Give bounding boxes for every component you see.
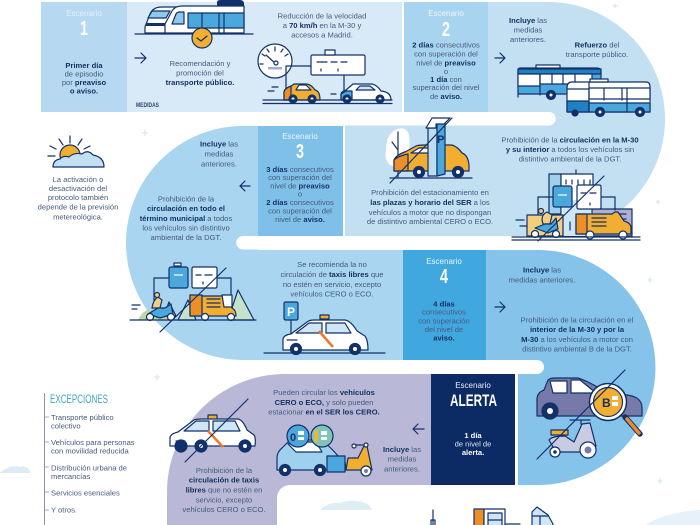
text: includes previous measures: medidas [205, 150, 234, 158]
text: M-30 interior ban: interior de la M-30 y por la [530, 325, 625, 334]
text: weather note: desactivación del [49, 184, 107, 193]
text: taxis recommendation: no estén en servicio, excepto [283, 280, 381, 289]
text: scenario 4 trigger: 4 días [433, 300, 455, 308]
text: scenario 3 trigger: 3 días consecutivos [266, 165, 334, 174]
arrow: scenario 3 [240, 181, 250, 191]
icon: car with magnifier and scooter [537, 370, 642, 459]
text: scenario 1 trigger: Primer día [65, 61, 103, 70]
white gap row 3-4 [0, 360, 544, 374]
list: exception items [44, 413, 135, 514]
text: scenario 3 trigger: con superación del [268, 173, 332, 182]
text: taxis recommendation: vehículos CERO o ECO. [290, 290, 374, 298]
text: taxi ban: Prohibición de la [196, 466, 252, 475]
icon: train [135, 0, 253, 48]
text: reinforcement: transporte público. [566, 50, 628, 59]
text: scenario 2 trigger: de aviso. [430, 92, 462, 101]
list: exception items: Y otros. [51, 506, 77, 514]
text: M-30 ban: distintivo ambiental de la DGT. [519, 154, 621, 164]
panel: scenario 1 measures [127, 2, 402, 112]
heading: scenario 1: 1 [80, 18, 88, 40]
text: allowed vehicles: Pueden circular los vehículos [273, 388, 375, 397]
heading: scenario 4 [426, 257, 462, 288]
text: scenario 4 trigger: del nivel de [425, 325, 463, 334]
list: exception items: Distribución urbana de [51, 464, 127, 472]
panel: exceptions list [44, 392, 135, 525]
text: weather note: metereológica. [53, 212, 103, 222]
panel: scenario 2 measures curve [345, 2, 665, 236]
text: includes previous measures: Incluye las [509, 16, 547, 25]
text: speed reduction: accesos a Madrid. [291, 30, 353, 40]
list: exception items: mercancías [51, 472, 90, 481]
text: taxi ban: servicio, excepto [196, 496, 252, 504]
icon: speedometer and sign [258, 44, 392, 104]
arrow: scenario 2 [495, 53, 505, 63]
list: exception items: Vehículos para personas [51, 438, 135, 447]
text: taxi ban: circulación de taxis [189, 476, 259, 484]
heading: scenario 3 [282, 132, 318, 163]
heading: alert: ALERTA [450, 391, 497, 410]
icon: van [190, 295, 236, 320]
text: scenario 3 trigger: nivel de preaviso [270, 182, 330, 191]
icon: weather sun and cloud [48, 136, 104, 167]
panel: scenario 1 row [41, 2, 402, 112]
text: includes previous measures: anteriores. [384, 464, 420, 474]
heading: scenario 3: Escenario [282, 132, 318, 141]
text: scenario 2 trigger: 1 día con [430, 75, 462, 84]
text: scenario 1 trigger: de episodio [65, 70, 103, 78]
text: weather note: depende de la previsión [38, 202, 118, 212]
icon: bus front [567, 79, 650, 116]
heading: scenario 2: Escenario [428, 9, 464, 18]
text: includes previous measures: anteriores. [510, 35, 546, 44]
arrow: scenario 1 [135, 53, 146, 63]
icon: scooter [549, 420, 596, 458]
arrow: alert [413, 424, 424, 434]
heading: alert [450, 381, 497, 410]
text: scenario 2 trigger: o [444, 67, 448, 76]
text: scenario 3 trigger: 2 días consecutivos [266, 198, 334, 207]
text: alert trigger: 1 día [464, 431, 482, 440]
text: public transport recommendation: Recomendación y [170, 59, 230, 68]
label: medidas: MEDIDAS [136, 102, 160, 109]
text: includes previous measures: medidas anteriores. [509, 276, 575, 284]
icon: eco badge [311, 425, 333, 447]
panel: scenario 3 label box [258, 126, 343, 236]
text: includes previous measures: medidas [514, 26, 543, 34]
icon: parking sign and taxi: P [287, 305, 295, 319]
heading: exceptions: EXCEPCIONES [50, 392, 108, 406]
icon: buses [518, 65, 650, 116]
text: municipal ban: término municipal a todos [140, 214, 232, 223]
panel: scenario 2 label box [404, 2, 488, 112]
white gap row 2-3 [236, 236, 700, 250]
list: exception items: Transporte público [51, 413, 114, 422]
text: SER parking ban: las plazas y horario del SER a los [370, 198, 490, 207]
icon: scooter rider [532, 208, 560, 238]
heading: alert: Escenario [455, 381, 491, 390]
panel: scenario 3 left curve [126, 126, 403, 360]
text: reinforcement: Refuerzo del [575, 40, 619, 50]
heading: scenario 1 [66, 9, 102, 40]
text: includes previous measures: Incluye las [383, 445, 421, 454]
list: exception items: con movilidad reducida [51, 446, 129, 456]
panel: alert label box [431, 374, 515, 485]
text: public transport recommendation: transporte público. [166, 78, 234, 87]
text: public transport recommendation: promoción del [176, 68, 224, 78]
heading: scenario 2: 2 [442, 19, 450, 41]
text: includes previous measures: medidas [388, 454, 417, 464]
heading: scenario 4: 4 [440, 266, 449, 288]
icon: van [576, 212, 631, 239]
text: SER parking ban: vehículos a motor que no dispongan [369, 208, 491, 217]
text: taxi ban: libres que no estén en [186, 486, 262, 494]
text: scenario 2 trigger: con superación del [414, 50, 478, 58]
text: SER parking ban: de distintivo ambiental CERO o ECO. [367, 217, 493, 226]
icon: yellow car [284, 84, 320, 103]
heading: scenario 2 [428, 9, 464, 41]
text: scenario 2 trigger: superación del nivel [412, 83, 480, 92]
text: allowed vehicles: estacionar en el SER los CERO. [268, 408, 380, 416]
text: scenario 2 trigger: 2 días consecutivos [412, 40, 480, 50]
text: scenario 4 trigger: con superación [418, 316, 470, 326]
text: scenario 3 trigger: nivel de aviso. [275, 215, 325, 224]
icon: magnifier B badge: B [602, 396, 611, 410]
text: M-30 interior ban: Prohibición de la circulación en el [521, 316, 633, 324]
panel: alert lilac curve [167, 374, 431, 525]
icon: zero badge: 0 [290, 432, 296, 444]
panel: scenario 1 label box [41, 2, 127, 112]
icon: parking ban car: P [437, 134, 444, 146]
text: municipal ban: ambiental de la DGT. [151, 233, 221, 242]
icon: bus back [518, 65, 601, 100]
text: scenario 3 trigger: o [298, 190, 302, 199]
text: alert trigger: alerta. [462, 448, 484, 457]
text: municipal ban: circulación en todo el [147, 204, 225, 213]
icon: taxi ban [170, 399, 255, 462]
text: scenario 1 trigger: por preaviso [62, 78, 106, 87]
text: includes previous measures: anteriores. [201, 160, 237, 168]
text: taxis recommendation: circulación de taxis libres que [280, 270, 384, 279]
text: SER parking ban: Prohibición del estacionamiento en [371, 188, 489, 197]
icon: parking sign and taxi [264, 302, 385, 354]
text: M-30 ban: y su interior a todos los vehículos sin [506, 145, 634, 154]
text: municipal ban: los vehículos sin distintivo [142, 223, 230, 232]
text: municipal ban: Prohibición de la [158, 194, 214, 204]
text: taxi ban: vehículos CERO o ECO. [182, 505, 266, 514]
text: M-30 interior ban: distintivo ambiental B de la DGT. [522, 344, 632, 354]
list: exception items: Servicios esenciales [51, 488, 120, 498]
text: allowed vehicles: CERO o ECO, y solo pueden [275, 398, 373, 407]
icon: scooter rider [146, 292, 174, 320]
text: taxis recommendation: Se recomienda la no [297, 260, 367, 269]
text: speed reduction: a 70 km/h en la M-30 y [283, 21, 361, 30]
icon: parking ban car [386, 118, 472, 183]
text: weather note: protocolo también [48, 193, 108, 202]
icon: blue and white car [341, 84, 391, 103]
panel: scenario 4 right curve [486, 250, 655, 485]
icon: zero and eco vehicles [277, 425, 372, 476]
text: scenario 2 trigger: nivel de preaviso [416, 58, 476, 68]
text: M-30 interior ban: M-30 a los vehículos a motor con [521, 335, 633, 344]
text: scenario 4 trigger: consecutivos [422, 308, 466, 316]
icon: bottom illustration [431, 507, 553, 525]
text: speed reduction: Reducción de la velocidad [278, 12, 366, 20]
text: includes previous measures: Incluye las [523, 266, 561, 274]
heading: scenario 4: Escenario [426, 257, 462, 266]
white gap between rows [0, 112, 556, 126]
icon: check badge [192, 28, 212, 48]
text: weather note: La activación o [53, 175, 103, 184]
list: exception items: colectivo [51, 422, 81, 430]
panel: scenario 4 label box [403, 250, 486, 360]
text: M-30 ban: Prohibición de la circulación en la M-30 [501, 136, 639, 144]
heading: scenario 1: Escenario [66, 9, 102, 18]
text: scenario 1 trigger: o aviso. [70, 86, 98, 96]
icon: city zone vehicles ban [512, 170, 640, 241]
text: alert trigger: de nivel de [455, 440, 491, 448]
text: scenario 3 trigger: con superación del [268, 206, 332, 215]
arrow: scenario 4 [495, 302, 505, 312]
icon: municipal ban vehicles [130, 263, 256, 332]
text: includes previous measures: Incluye las [200, 140, 238, 148]
heading: scenario 3: 3 [296, 141, 304, 163]
text: scenario 4 trigger: aviso. [433, 334, 455, 342]
icon: yellow scooter [346, 443, 372, 476]
